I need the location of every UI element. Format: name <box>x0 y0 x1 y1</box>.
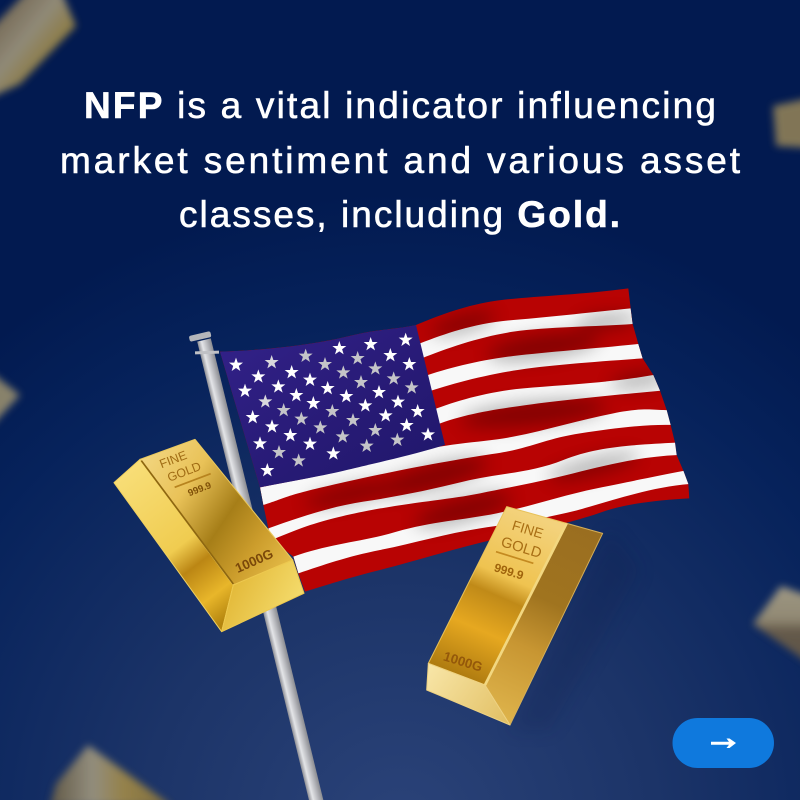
left bar engraved text: FINE <box>158 448 189 471</box>
flag fold shading <box>303 307 671 533</box>
left bar engraved text: GOLD <box>165 459 203 485</box>
left bar end face <box>222 560 304 632</box>
right bar engraved text: FINE <box>510 517 545 542</box>
left bar bevel edge <box>141 461 233 584</box>
gold bar: left <box>114 439 304 632</box>
US flag <box>213 280 697 597</box>
blurred gold bar: left edge <box>0 370 20 430</box>
flag red field <box>213 280 697 597</box>
flag white stripes <box>260 308 690 573</box>
left bar engraved text: 1000G <box>233 546 276 576</box>
title <box>60 85 741 235</box>
next button <box>672 718 774 768</box>
left bar engraved text <box>158 448 276 576</box>
shadow behind flag-side gold bar <box>510 530 640 730</box>
title line 3: classes, including Gold. <box>179 194 620 235</box>
flag stars <box>229 333 435 476</box>
right bar engraved text: 1000G <box>442 649 484 675</box>
right bar engraved text <box>442 517 545 675</box>
blurred gold bar: top right <box>773 98 800 148</box>
blurred gold bar: bottom left <box>50 745 172 800</box>
right bar engraved text: GOLD <box>499 534 543 562</box>
right bar top face <box>428 507 567 685</box>
button arrow <box>711 738 736 748</box>
right bar engraved text: 999.9 <box>492 560 526 583</box>
left bar side face <box>114 459 233 632</box>
gold bar: right <box>427 507 603 725</box>
flag canton <box>213 325 445 487</box>
right bar side face <box>485 523 603 725</box>
left bar top face <box>140 439 293 585</box>
title line 2: market sentiment and various asset <box>60 140 741 181</box>
right bar end face <box>427 663 510 725</box>
flag pole <box>189 331 324 800</box>
left bar engraved text: 999.9 <box>187 480 214 499</box>
title line 1: NFP is a vital indicator influencing <box>84 85 716 126</box>
blurred gold bar: top left <box>0 0 76 100</box>
right bar highlight edge <box>485 523 567 685</box>
blurred gold bar: right edge <box>753 586 800 668</box>
